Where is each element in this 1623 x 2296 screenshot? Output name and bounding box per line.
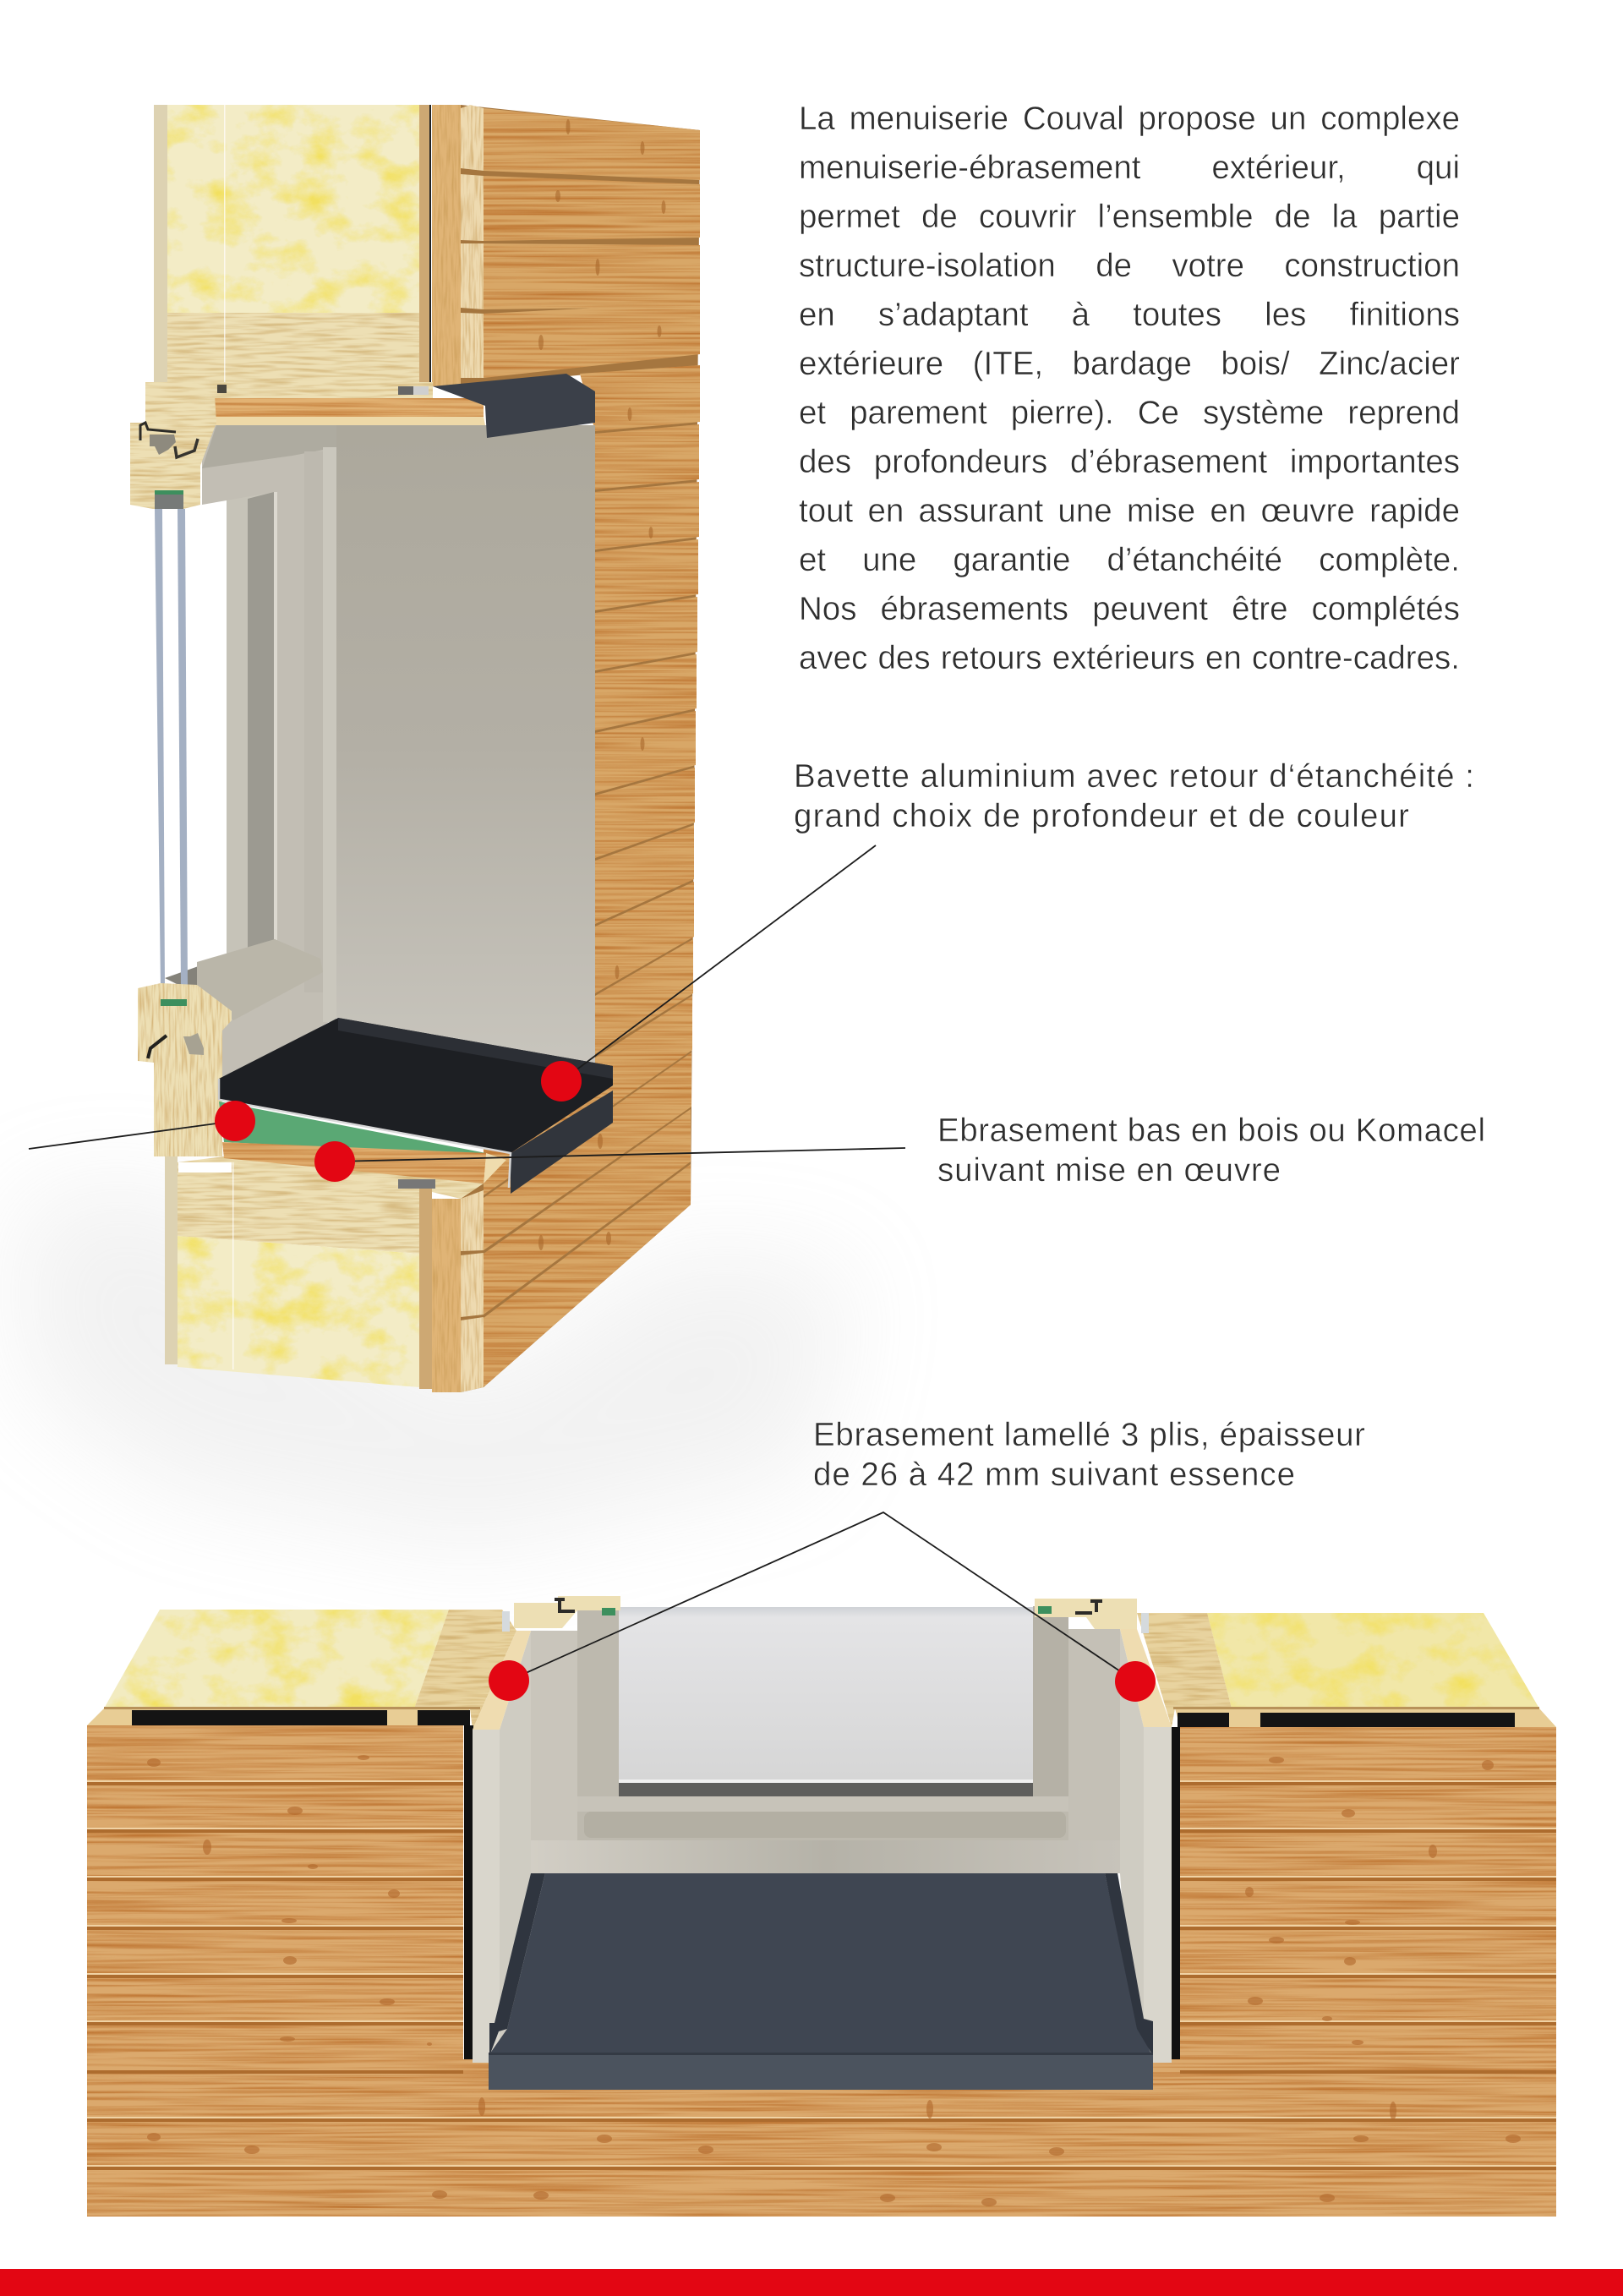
lower sash section [138, 983, 232, 1156]
intro paragraph: La menuiserie Couval propose un complexe [799, 101, 1460, 137]
left insulation top [87, 1610, 516, 1730]
intro paragraph [799, 101, 1460, 676]
aluminium sill front view [489, 1873, 1153, 2090]
callout: ebrasement lamellé: de 26 à 42 mm suivant essence [813, 1457, 1295, 1493]
right reveal [1120, 1629, 1180, 2063]
upper wall section [154, 105, 461, 386]
intro paragraph: menuiserie-ébrasement extérieur, qui [799, 150, 1460, 186]
callout: ebrasement bas [937, 1112, 1485, 1189]
left cladding planks [87, 1725, 463, 2074]
callout lines [29, 845, 1135, 1681]
left reveal [464, 1631, 531, 2063]
callout: bavette [794, 758, 1474, 834]
callout: ebrasement lamellé [813, 1417, 1365, 1493]
low reveal board [222, 1142, 506, 1184]
window frame in grey [165, 425, 336, 1082]
callout: ebrasement bas: Ebrasement bas en bois ou Komacel [937, 1112, 1485, 1149]
interior reveal wall [336, 425, 595, 1067]
footer red bar [0, 2269, 1623, 2296]
intro paragraph: avec des retours extérieurs en contre-cadres. [799, 640, 1460, 676]
facade drawing: front view [87, 1596, 1556, 2217]
base cladding planks [87, 2059, 1556, 2217]
glazing panes [155, 509, 188, 989]
aluminium sill [219, 1018, 613, 1194]
floor shadow [17, 1184, 854, 1547]
intro paragraph: en s’adaptant à toutes les finitions [799, 297, 1460, 333]
callout: bavette: Bavette aluminium avec retour d‘étanchéité : [794, 758, 1474, 795]
intro paragraph: tout en assurant une mise en œuvre rapide [799, 493, 1460, 529]
window head sections [514, 1596, 1137, 1629]
lower wall section [165, 1156, 484, 1392]
intro paragraph: et parement pierre). Ce système reprend [799, 395, 1460, 431]
right cladding planks [1180, 1727, 1556, 2074]
insulation board under sill [219, 1102, 486, 1155]
intro paragraph: structure-isolation de votre construction [799, 248, 1460, 284]
window opening [531, 1606, 1120, 1873]
red markers [215, 1061, 1156, 1702]
intro paragraph: permet de couvrir l’ensemble de la partie [799, 199, 1460, 235]
intro paragraph: des profondeurs d’ébrasement importantes [799, 444, 1460, 480]
callout: ebrasement bas: suivant mise en œuvre [937, 1152, 1281, 1189]
upper metal flashing [433, 374, 595, 438]
callout: bavette: grand choix de profondeur et de couleur [794, 798, 1409, 834]
intro paragraph: et une garantie d’étanchéité complète. [799, 542, 1460, 578]
intro paragraph: extérieure (ITE, bardage bois/ Zinc/acier [799, 346, 1460, 382]
callout: ebrasement lamellé: Ebrasement lamellé 3 plis, épaisseur [813, 1417, 1365, 1453]
section drawing: vertical cut [130, 105, 700, 1392]
head board and frame section [130, 382, 485, 509]
upper cladding planks [461, 105, 700, 1392]
right insulation top [1137, 1613, 1556, 1727]
intro paragraph: Nos ébrasements peuvent être complétés [799, 591, 1460, 627]
